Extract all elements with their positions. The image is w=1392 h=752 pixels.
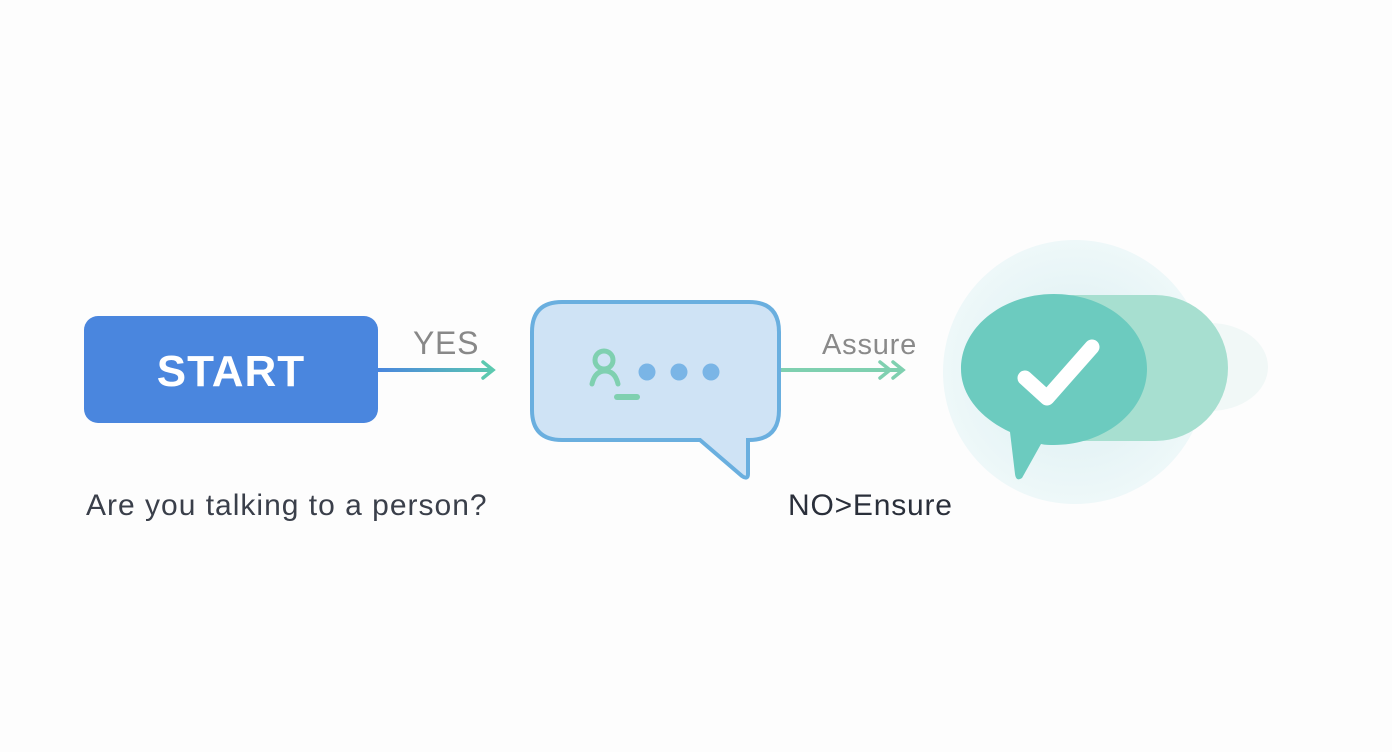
speech bubble with person icon xyxy=(532,302,779,478)
no ensure text: NO>Ensure xyxy=(788,489,953,522)
arrow: yes: YES xyxy=(413,325,479,361)
arrow: assure: Assure xyxy=(822,329,917,361)
icon: confirmed chat with check xyxy=(943,240,1268,504)
arrow: assure xyxy=(781,329,917,378)
icon: person xyxy=(592,351,637,397)
start box: START xyxy=(157,347,305,396)
question text: Are you talking to a person? xyxy=(86,489,488,522)
start box xyxy=(84,316,378,423)
arrow: yes xyxy=(378,325,493,378)
icon: typing dots xyxy=(638,364,720,380)
